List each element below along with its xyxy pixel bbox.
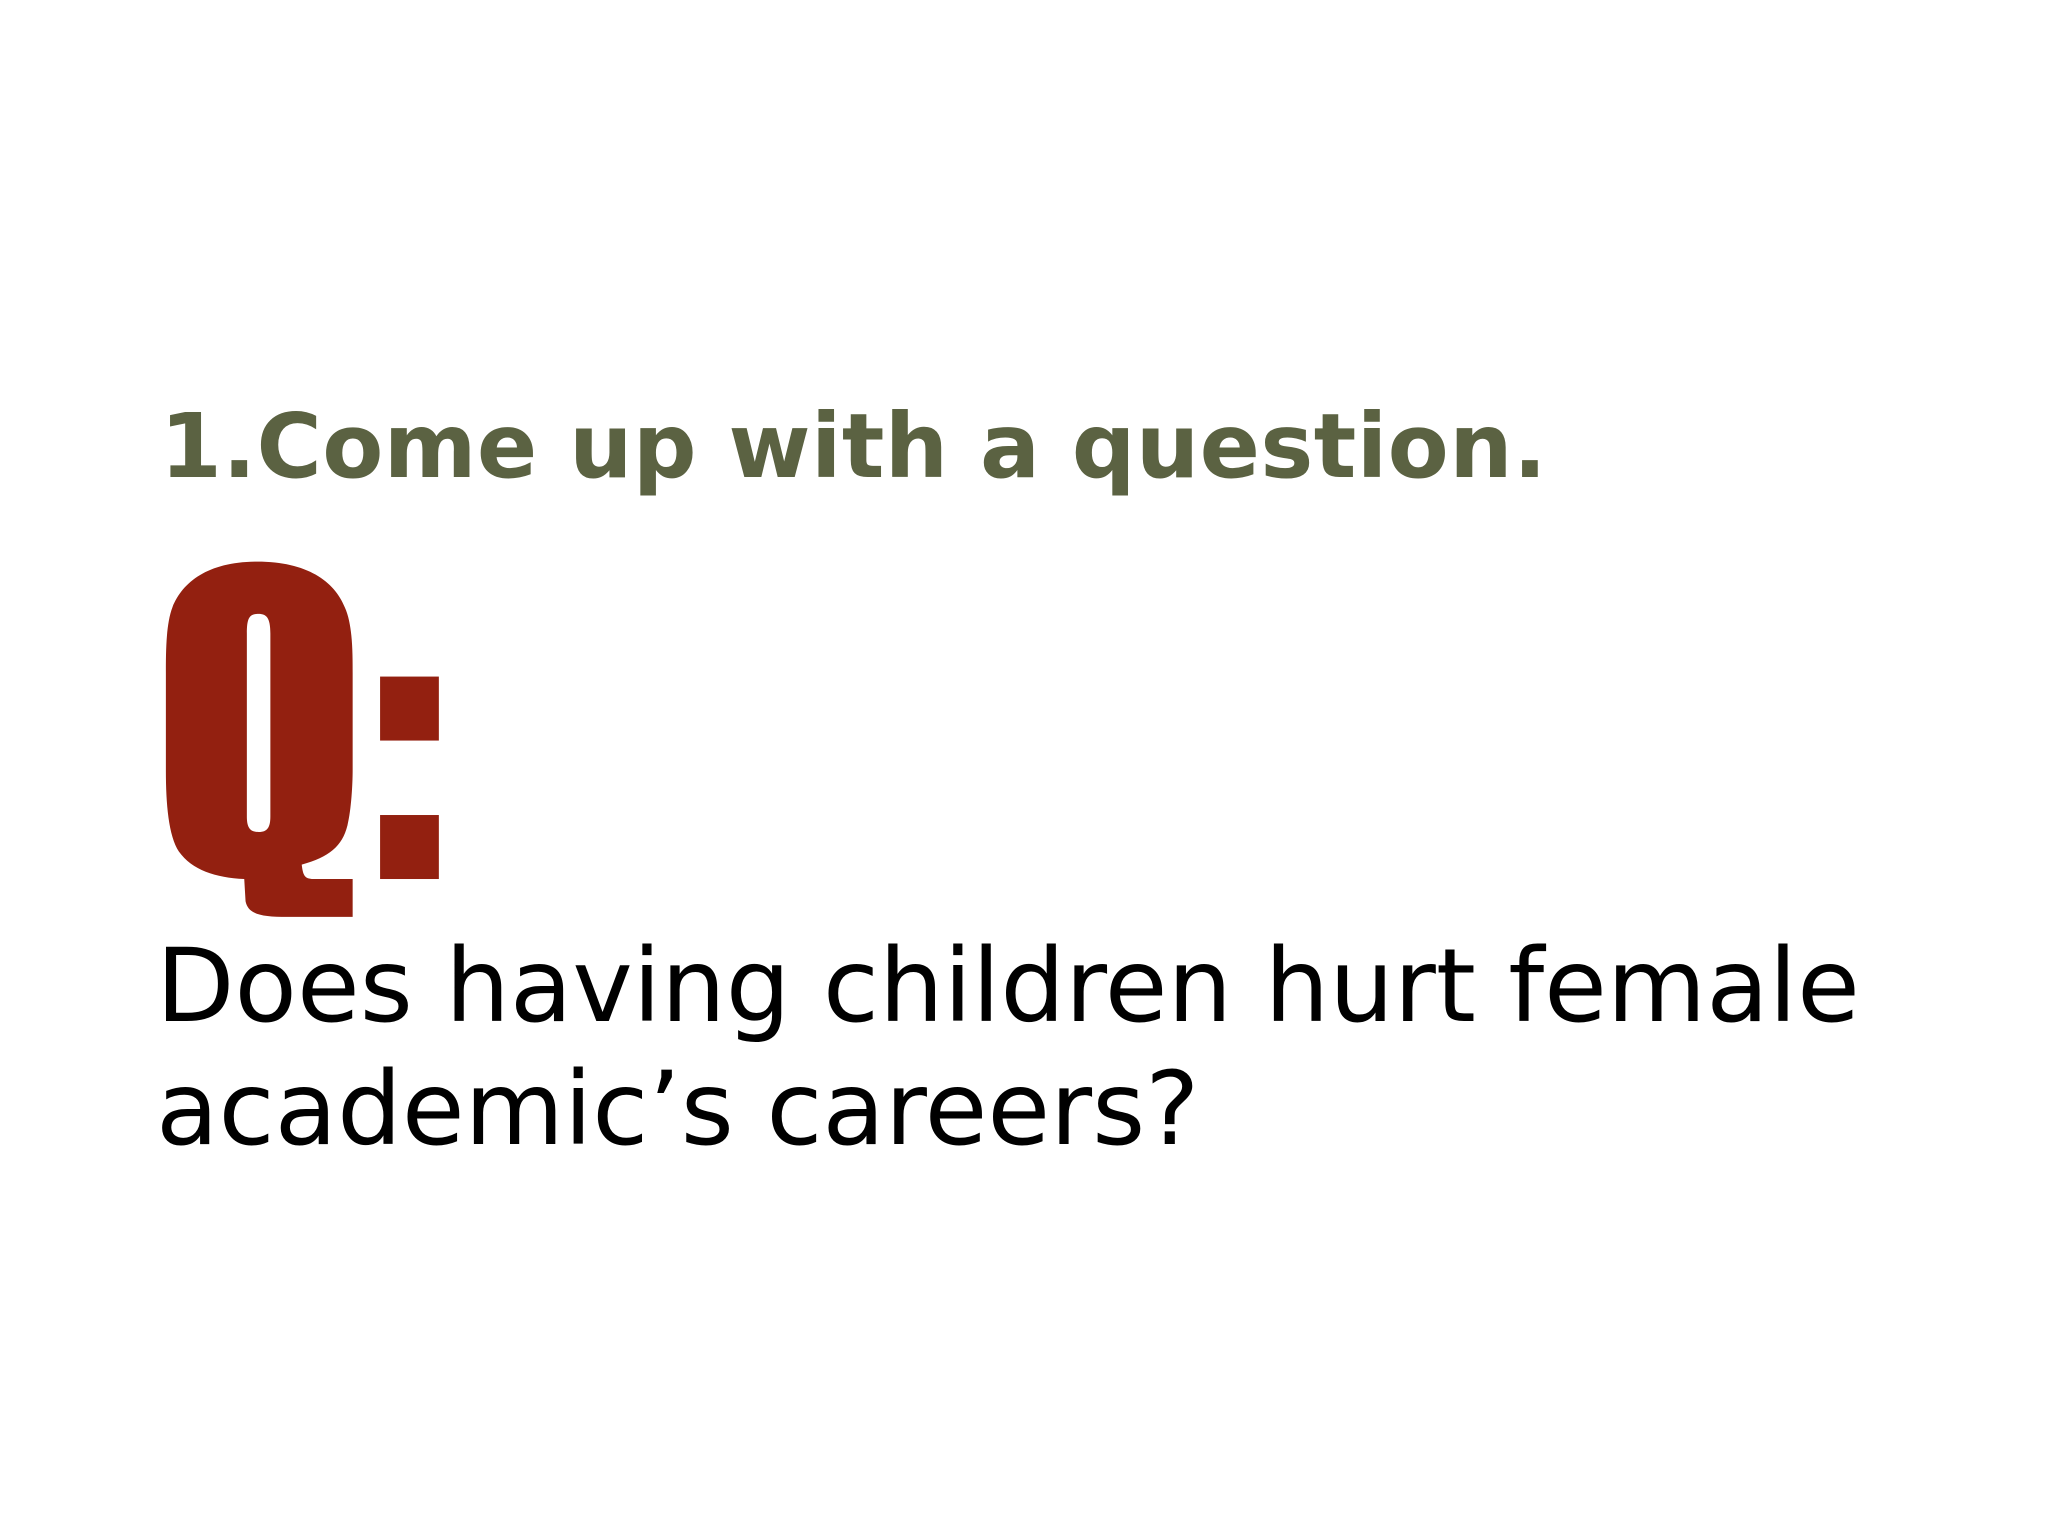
question text [156,927,1860,1169]
title: 1.Come up with a question. [160,394,1547,498]
question text: academic’s careers? [156,1050,1199,1169]
question text: Does having children hurt female [156,927,1860,1046]
